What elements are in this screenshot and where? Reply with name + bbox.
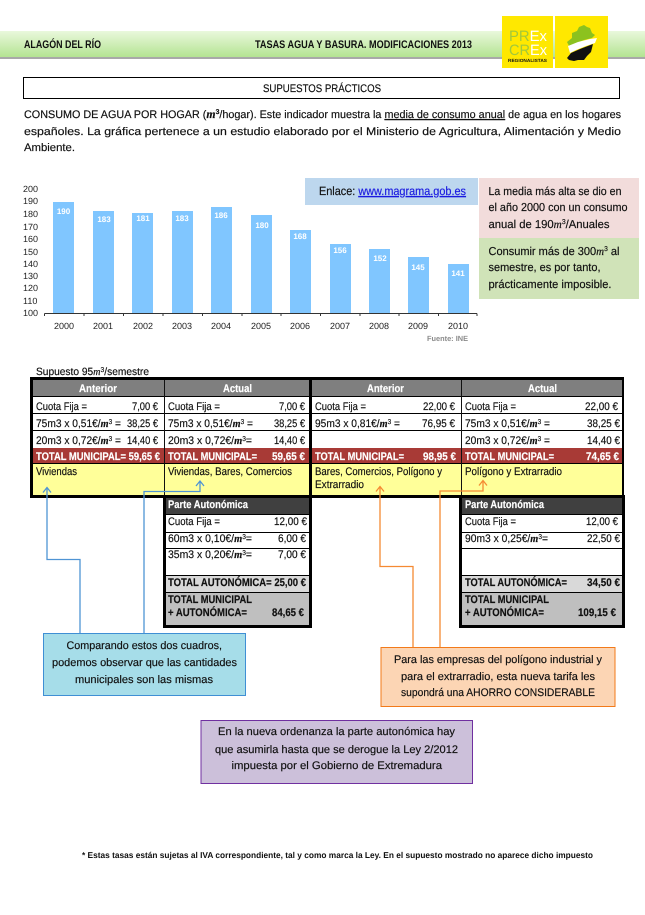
- column: actual: 75m3 x 0,51€/m: [168, 418, 241, 430]
- intro paragraph: CONSUMO DE AGUA POR HOGAR (m: [24, 107, 216, 121]
- bar values: 141: [451, 269, 465, 278]
- bar chart: water consumption 2000-2010: [23, 184, 477, 343]
- column: anterior: [315, 383, 456, 491]
- table: parte autonómica left: Parte Autonómica: [168, 499, 249, 511]
- bars: [53, 202, 469, 313]
- table: parte autonómica left: 3: [242, 534, 246, 541]
- column: actual: 14,40 €: [587, 435, 620, 447]
- logo: PREx CREx: REGIONALISTAS: [508, 58, 547, 63]
- x axis labels: 2004: [211, 321, 231, 331]
- callout: comparison: [44, 634, 246, 696]
- x axis labels: 2006: [290, 321, 310, 331]
- y axis labels: 160: [23, 234, 38, 244]
- heading: supuestos prácticos: [24, 78, 620, 98]
- x axis labels: 2000: [54, 321, 74, 331]
- x axis labels: [54, 321, 468, 331]
- column: anterior: Anterior: [79, 383, 118, 395]
- column: anterior: 75m3 x 0,51€/m: [36, 418, 109, 430]
- table: parte autonómica right: 22,50 €: [587, 533, 620, 545]
- intro paragraph: 3: [216, 109, 219, 116]
- table: parte autonómica left: + AUTONÓMICA=: [168, 606, 247, 619]
- column: actual: 59,65 €: [272, 451, 305, 463]
- callout: consumption limit: prácticamente imposible.: [488, 279, 612, 291]
- table block right: anterior and actual: [310, 377, 624, 498]
- column: actual: =: [541, 435, 550, 447]
- logo: PREx CREx: CREx: [509, 42, 547, 59]
- y axis labels: 180: [23, 209, 38, 219]
- bar values: 181: [136, 214, 150, 223]
- intro paragraph: media de consumo anual de agua en los hogares: [384, 109, 623, 121]
- header band: [0, 31, 645, 59]
- bar values: 156: [333, 246, 347, 255]
- callout: comparison: podemos observar que las cantidades: [52, 657, 237, 669]
- intro paragraph: Ambiente.: [24, 142, 75, 154]
- column: actual: [465, 383, 620, 478]
- scenario caption: Supuesto 95m: [36, 366, 101, 378]
- column: actual: Polígono y Extrarradio: [465, 466, 562, 478]
- x axis labels: 2005: [251, 321, 271, 331]
- callout: consumption limit: Consumir más de 300m: [488, 246, 604, 258]
- table: parte autonómica left: 7,00 €: [278, 549, 306, 561]
- table: parte autonómica right: TOTAL MUNICIPAL: [465, 594, 549, 606]
- column: actual: 3: [242, 436, 246, 443]
- column: actual: 74,65 €: [586, 451, 619, 463]
- table: parte autonómica right: TOTAL AUTONÓMICA=: [465, 576, 567, 589]
- callout: highest average: anual de 190m: [488, 219, 562, 231]
- column: anterior: Cuota Fija =: [36, 401, 87, 413]
- column: actual: 3: [538, 419, 541, 426]
- x axis labels: 2008: [369, 321, 389, 331]
- table: parte autonómica left: TOTAL AUTONÓMICA= 25,00 €: [168, 576, 306, 589]
- column: anterior: 7,00 €: [132, 401, 158, 413]
- column: actual: [168, 383, 305, 478]
- callout: regional share: En la nueva ordenanza la parte autonómica hay: [218, 726, 456, 738]
- intro paragraph: españoles. La gráfica pertenece a un estudio elaborado por el Ministerio de Agricultura, Alimentación y Medio: [24, 126, 621, 138]
- column: actual: 3: [538, 436, 541, 443]
- chart source: Fuente: INE: [427, 334, 468, 343]
- column: anterior: =: [112, 435, 121, 447]
- column: anterior: 3: [388, 419, 391, 426]
- column: anterior: TOTAL MUNICIPAL= 59,65 €: [36, 451, 160, 463]
- logo: Extremadura map: [555, 16, 608, 68]
- logo: PREx CREx: [502, 16, 553, 68]
- bar values: 183: [97, 215, 111, 224]
- callout: consumption limit: semestre, es por tanto,: [488, 262, 600, 274]
- column: actual: Cuota Fija =: [168, 401, 220, 413]
- x axis labels: 2009: [408, 321, 428, 331]
- callout: regional share: [201, 720, 472, 784]
- y axis labels: 150: [23, 247, 38, 257]
- logo: PREx CREx: PREx: [509, 28, 547, 45]
- callout: consumption limit: 3: [604, 246, 608, 253]
- link box: Enlace: www.magrama.gob.es: [319, 184, 466, 198]
- y axis labels: 170: [23, 222, 38, 232]
- column: anterior: 38,25 €: [127, 418, 158, 430]
- table: parte autonómica left: 12,00 €: [274, 516, 307, 528]
- column: anterior: =: [112, 418, 121, 430]
- y axis labels: 140: [23, 259, 38, 269]
- table: parte autonómica left: 3: [242, 550, 246, 557]
- column: anterior: 14,40 €: [127, 435, 158, 447]
- column: actual: =: [246, 435, 252, 447]
- column: actual: 38,25 €: [587, 418, 620, 430]
- y axis labels: 120: [23, 283, 38, 293]
- column: anterior: 76,95 €: [422, 418, 455, 430]
- table: parte autonómica right: 34,50 €: [587, 577, 620, 589]
- column: anterior: Viviendas: [36, 466, 77, 478]
- table: parte autonómica left: 60m3 x 0,10€/m: [168, 533, 243, 545]
- column: actual: 22,00 €: [585, 401, 618, 413]
- scenario caption: /semestre: [104, 366, 149, 378]
- column: anterior: 22,00 €: [423, 401, 455, 413]
- callout: savings: Para las empresas del polígono industrial y: [394, 654, 602, 666]
- x axis labels: 2002: [133, 321, 153, 331]
- heading: supuestos prácticos: SUPUESTOS PRÁCTICOS: [263, 82, 381, 95]
- table: parte autonómica right: 12,00 €: [586, 516, 618, 528]
- callout: savings: [381, 648, 615, 706]
- table block left: anterior and actual: [30, 377, 312, 498]
- column: anterior: Cuota Fija =: [315, 401, 366, 413]
- callout: regional share: impuesta por el Gobierno de Extremadura: [232, 760, 443, 772]
- link box: [305, 178, 478, 205]
- table: parte autonómica left: Cuota Fija =: [168, 516, 220, 528]
- callout: highest average: 3: [562, 219, 566, 226]
- table: parte autonómica left: TOTAL MUNICIPAL: [168, 594, 252, 606]
- arrow: orange to Bares, Comercios: [376, 486, 413, 648]
- column: anterior: 3: [109, 419, 112, 426]
- table: parte autonómica right: 90m3 x 0,25€/m: [465, 533, 539, 545]
- callout: highest average: el año 2000 con un consumo: [488, 202, 628, 214]
- intro paragraph: [24, 107, 621, 154]
- column: actual: 14,40 €: [274, 435, 305, 447]
- column: actual: Actual: [223, 383, 252, 395]
- arrow: blue to Viviendas, Bares, Comercios: [144, 481, 204, 634]
- callout: comparison: Comparando estos dos cuadros,: [66, 640, 222, 652]
- header: municipality: ALAGÓN DEL RÍO: [24, 38, 101, 51]
- x axis: [44, 314, 477, 316]
- callout: consumption limit: [479, 238, 639, 299]
- table: parte autonómica right: [459, 495, 625, 628]
- column: anterior: [36, 383, 160, 478]
- callout: highest average: /Anuales: [566, 219, 610, 231]
- column: anterior: 20m3 x 0,72€/m: [36, 435, 109, 447]
- y axis labels: 190: [23, 196, 38, 206]
- column: actual: 7,00 €: [279, 401, 305, 413]
- table: parte autonómica right: + AUTONÓMICA=: [465, 606, 544, 619]
- scenario caption: 3: [101, 367, 104, 374]
- table: parte autonómica right: =: [542, 533, 548, 545]
- arrow: orange to Polígono y Extrarradio: [440, 480, 487, 648]
- column: actual: =: [244, 418, 253, 430]
- table: parte autonómica left: 35m3 x 0,20€/m: [168, 549, 243, 561]
- bar values: 190: [57, 207, 71, 216]
- column: anterior: 98,95 €: [423, 451, 456, 463]
- column: actual: 3: [241, 419, 244, 426]
- column: actual: 20m3 x 0,72€/m: [168, 435, 243, 447]
- table: parte autonómica right: Parte Autonómica: [465, 499, 545, 511]
- y axis labels: 110: [23, 296, 37, 306]
- table: parte autonómica right: 109,15 €: [578, 607, 616, 619]
- y axis labels: [23, 184, 38, 318]
- callout: consumption limit: al: [608, 246, 620, 258]
- y axis labels: 100: [23, 308, 38, 318]
- bar values: 180: [255, 221, 269, 230]
- column: actual: Cuota Fija =: [465, 401, 516, 413]
- bar values: [57, 207, 465, 278]
- callout: highest average: La media más alta se dio en: [488, 186, 622, 198]
- bar values: 145: [411, 263, 425, 272]
- callout: savings: para el extrarradio, esta nueva tarifa les: [401, 671, 595, 683]
- arrow: blue to Viviendas: [43, 488, 80, 634]
- column: anterior: 3: [109, 436, 112, 443]
- table: parte autonómica right: 3: [538, 534, 542, 541]
- column: actual: TOTAL MUNICIPAL=: [168, 451, 257, 463]
- column: actual: TOTAL MUNICIPAL=: [465, 451, 554, 463]
- column: actual: Actual: [528, 383, 557, 395]
- footnote: * Estas tasas están sujetas al IVA correspondiente, tal y como marca la Ley. En el supuesto mostrado no aparece dicho impuesto: [82, 850, 593, 860]
- table: parte autonómica left: 84,65 €: [272, 607, 304, 619]
- bar values: 186: [214, 211, 228, 220]
- column: actual: 75m3 x 0,51€/m: [465, 418, 538, 430]
- column: actual: Viviendas, Bares, Comercios: [168, 466, 292, 478]
- intro paragraph: /hogar). Este indicador muestra la: [219, 109, 384, 121]
- table: parte autonómica left: =: [246, 549, 252, 561]
- column: anterior: Anterior: [367, 383, 405, 395]
- column: anterior: Bares, Comercios, Polígono y: [315, 466, 442, 478]
- x axis labels: 2003: [172, 321, 192, 331]
- table: parte autonómica left: 6,00 €: [278, 533, 306, 545]
- column: actual: 20m3 x 0,72€/m: [465, 435, 538, 447]
- x axis labels: 2007: [330, 321, 350, 331]
- table: parte autonómica left: =: [246, 533, 252, 545]
- column: actual: =: [541, 418, 550, 430]
- callout: comparison: municipales son las mismas: [75, 674, 214, 686]
- header: document title: TASAS AGUA Y BASURA. MODIFICACIONES 2013: [255, 39, 472, 51]
- bar values: 168: [293, 232, 307, 241]
- column: anterior: =: [391, 418, 400, 430]
- callout: highest average: [479, 178, 639, 238]
- column: actual: 38,25 €: [274, 418, 305, 430]
- table: parte autonómica left: [163, 495, 312, 628]
- callout: regional share: que asumirla hasta que se derogue la Ley 2/2012: [215, 744, 458, 756]
- y axis labels: 200: [23, 184, 38, 194]
- x axis labels: 2010: [448, 321, 468, 331]
- column: anterior: TOTAL MUNICIPAL=: [315, 451, 404, 463]
- bar values: 152: [373, 254, 387, 263]
- x axis labels: 2001: [93, 321, 113, 331]
- column: anterior: Extrarradio: [315, 479, 364, 491]
- bar values: 183: [175, 214, 189, 223]
- callout: savings: supondrá una AHORRO CONSIDERABLE: [401, 687, 595, 699]
- y axis labels: 130: [23, 271, 38, 281]
- table: parte autonómica right: Cuota Fija =: [465, 516, 516, 528]
- column: anterior: 95m3 x 0,81€/m: [315, 418, 388, 430]
